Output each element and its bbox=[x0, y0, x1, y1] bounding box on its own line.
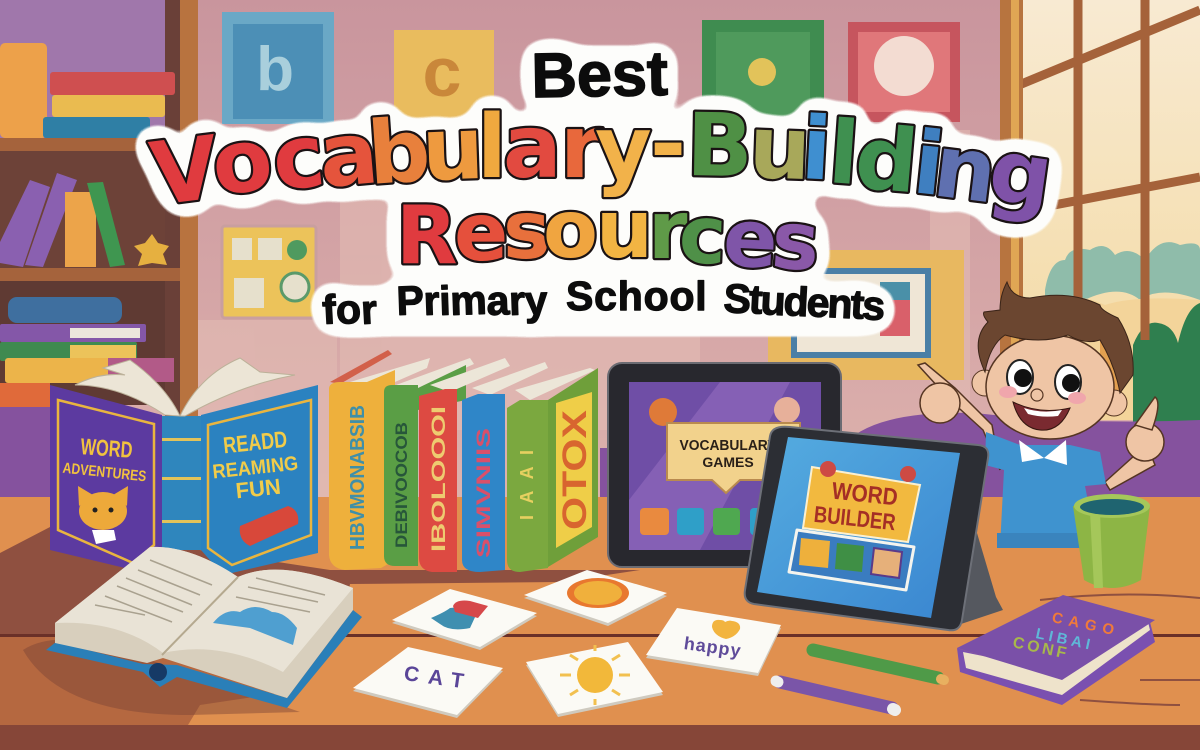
row of standing books: IAAI bbox=[517, 450, 537, 520]
title line: Vocabulary-Building: o bbox=[206, 107, 278, 216]
tablet: word builder: WORD bbox=[831, 478, 899, 511]
table bbox=[0, 497, 1200, 750]
card: sun bbox=[526, 642, 663, 717]
book: word adventures with open pages bbox=[50, 358, 318, 575]
row of standing books: IBOLOOOI bbox=[429, 406, 450, 552]
title line: Resources: e bbox=[721, 191, 780, 287]
title line: Vocabulary-Building: a bbox=[503, 96, 562, 198]
title line: Vocabulary-Building: B bbox=[686, 94, 754, 197]
title line: Vocabulary-Building: y bbox=[595, 97, 652, 199]
white sticker backing bbox=[165, 60, 1020, 322]
flashcards bbox=[353, 570, 781, 718]
row of standing books bbox=[329, 350, 598, 572]
markers bbox=[776, 650, 944, 710]
book: word adventures with open pages: ADVENTURES bbox=[62, 460, 147, 485]
row of standing books: SIMVNIIS bbox=[474, 428, 495, 558]
tablet: vocabulary games: VOCABULARY bbox=[680, 438, 777, 454]
card: sun orange bbox=[524, 570, 667, 626]
title line: Resources: u bbox=[596, 183, 653, 276]
row of standing books: HBVMONABSIB bbox=[347, 405, 369, 550]
title line: Vocabulary-Building: - bbox=[650, 93, 686, 195]
book: word adventures with open pages: WORD bbox=[80, 433, 133, 463]
title line: Vocabulary-Building: u bbox=[747, 96, 813, 200]
wall posters: b bbox=[256, 35, 294, 104]
wall posters: c bbox=[423, 33, 461, 111]
cup bbox=[1073, 494, 1150, 588]
title line: for Primary School Students: Students bbox=[723, 275, 886, 329]
wall posters bbox=[222, 12, 964, 380]
title line: for Primary School Students: School bbox=[566, 273, 707, 319]
title line: Vocabulary-Building: r bbox=[560, 96, 603, 198]
wall panels bbox=[197, 130, 970, 500]
title line: Vocabulary-Building: i bbox=[799, 97, 834, 201]
card: cat: CAT bbox=[403, 662, 465, 693]
title line: Resources: e bbox=[454, 186, 508, 279]
title line: Resources: s bbox=[503, 184, 551, 277]
title line: Vocabulary-Building: u bbox=[420, 97, 486, 201]
title line: Resources: s bbox=[769, 193, 823, 289]
title line: Vocabulary-Building: c bbox=[268, 104, 329, 211]
tablet: word builder bbox=[745, 427, 1003, 630]
book: word adventures with open pages: REAMING bbox=[211, 453, 299, 483]
book: word adventures with open pages: READD bbox=[222, 426, 288, 458]
bookshelf bbox=[0, 0, 198, 420]
title line: Vocabulary-Building: i bbox=[909, 111, 949, 216]
title line: Resources: R bbox=[396, 189, 458, 282]
purple book: CONF bbox=[1011, 634, 1071, 663]
tablet: vocabulary games bbox=[608, 363, 841, 567]
purple book: CAGO bbox=[1050, 609, 1121, 640]
title bbox=[145, 39, 1059, 333]
title line: for Primary School Students: for bbox=[321, 286, 378, 333]
card: happy bbox=[646, 608, 781, 676]
row of standing books: DEBIVOOCOB bbox=[392, 422, 411, 548]
title line: Vocabulary-Building: V bbox=[145, 116, 224, 226]
purple book: LIBAI bbox=[1034, 625, 1096, 654]
title line: Resources: o bbox=[543, 183, 598, 276]
title line: for Primary School Students: Primary bbox=[396, 277, 548, 324]
card: happy: happy bbox=[683, 633, 743, 661]
tablet: word builder: BUILDER bbox=[813, 501, 897, 535]
title line: Resources: c bbox=[677, 188, 728, 283]
title line: Vocabulary-Building: l bbox=[826, 101, 862, 205]
row of standing books: OTOX bbox=[556, 410, 594, 530]
title line: Vocabulary-Building: n bbox=[928, 115, 1002, 223]
title line: Vocabulary-Building: l bbox=[477, 96, 507, 198]
card: creature bbox=[392, 589, 537, 650]
purple wall base and bench bbox=[0, 407, 1200, 500]
title line: Resources: r bbox=[648, 184, 688, 277]
title line: Vocabulary-Building: d bbox=[851, 106, 922, 213]
title line: Best: Best bbox=[531, 39, 669, 111]
open book on table bbox=[23, 547, 362, 715]
boy character bbox=[918, 282, 1164, 548]
book: word adventures with open pages: FUN bbox=[234, 474, 282, 503]
title line: Vocabulary-Building: a bbox=[315, 101, 382, 208]
card: cat bbox=[353, 647, 503, 718]
purple book bbox=[957, 595, 1155, 705]
tablet: vocabulary games: GAMES bbox=[702, 454, 754, 470]
window bbox=[1000, 0, 1200, 425]
title line: Vocabulary-Building: b bbox=[364, 99, 434, 205]
title line: Vocabulary-Building: g bbox=[983, 119, 1059, 228]
